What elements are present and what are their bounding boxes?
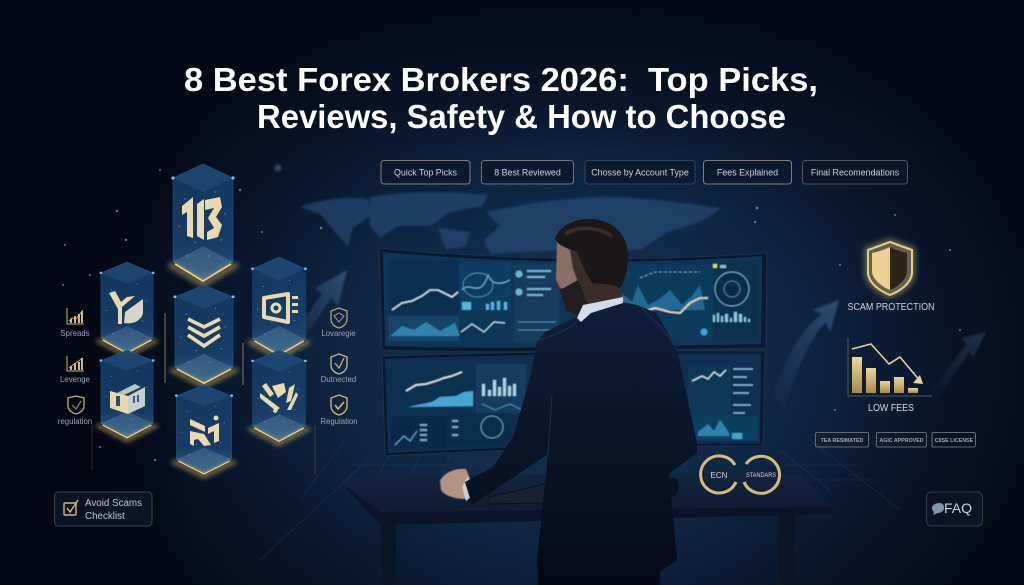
badge: ASIC xyxy=(876,432,926,447)
low fees label: LOW FEES xyxy=(868,403,914,414)
upper monitor xyxy=(379,248,767,352)
feature: regulation: regulation xyxy=(58,417,92,426)
title: Reviews, Safety & How to Choose xyxy=(257,98,786,135)
avoid scams checklist xyxy=(54,492,152,526)
FAQ button: FAQ xyxy=(944,500,972,516)
collar xyxy=(577,297,623,322)
tab: 8 best reviewed: 8 Best Reviewed xyxy=(494,168,561,178)
avoid scams checklist: Checklist xyxy=(85,511,125,522)
tab: quick top picks: Quick Top Picks xyxy=(394,168,458,178)
cube: centre bottom xyxy=(173,385,235,476)
jacket highlights xyxy=(540,307,677,454)
avoid scams checklist: Avoid Scams xyxy=(85,498,142,509)
tab: fees explained xyxy=(704,160,792,184)
ECN and standard rings xyxy=(701,456,780,493)
feature: spreads: Spreads xyxy=(60,329,90,338)
right chart panels xyxy=(625,265,713,337)
tab: choose by account type xyxy=(585,160,695,184)
left feature icons xyxy=(58,308,92,426)
feature: connected shield: Dutnected xyxy=(321,375,356,384)
cube: centre xyxy=(171,285,237,386)
title: 8 Best Forex Brokers 2026: Top Picks, xyxy=(184,61,818,98)
badge: FCA: TEA RESIMATED xyxy=(821,438,864,444)
regulation badges xyxy=(816,432,976,447)
arrow: far right xyxy=(928,332,986,398)
arrow: left cluster xyxy=(285,270,347,352)
cube: left upper xyxy=(97,262,157,356)
tab: fees explained: Fees Explained xyxy=(717,168,778,178)
cube: nB logo xyxy=(169,164,237,284)
tab: quick top picks xyxy=(381,160,470,184)
hand xyxy=(440,469,473,499)
cube: right upper xyxy=(249,257,309,358)
feature: leverage shield: Lovaregie xyxy=(321,329,356,338)
icon: chat bubble xyxy=(932,503,944,515)
cube: right lower xyxy=(249,350,309,444)
feature: leverage: Levenge xyxy=(60,375,90,384)
world map xyxy=(300,192,722,254)
cube: left lower xyxy=(97,350,157,440)
scam protection label: SCAM PROTECTION xyxy=(848,302,934,313)
keyboard xyxy=(487,484,545,504)
neck and face xyxy=(556,240,623,318)
tab: 8 best reviewed xyxy=(482,160,574,184)
jacket xyxy=(465,302,697,585)
big background arrows xyxy=(285,270,986,410)
ring: ECN: ECN xyxy=(711,471,728,480)
left chart panels xyxy=(391,364,758,449)
hair xyxy=(555,219,628,288)
left chart panels xyxy=(388,261,759,342)
scam protection shield xyxy=(868,242,912,295)
connector lines xyxy=(92,313,315,475)
badge: CySEC xyxy=(932,432,976,447)
badge: CySEC: CIISE LICENSE xyxy=(935,438,974,444)
ring: standard: STANDARS xyxy=(746,472,776,479)
mouse xyxy=(667,478,679,496)
low fees chart xyxy=(848,338,932,396)
broker cubes xyxy=(92,164,315,476)
arrow: centre right xyxy=(770,300,839,410)
floor grid xyxy=(260,440,900,560)
shirt cuff xyxy=(462,476,472,501)
badge: ASIC: AGIC APPROVED xyxy=(879,438,924,444)
tab: final recommendations xyxy=(802,160,908,184)
person xyxy=(440,219,697,585)
icon: checklist xyxy=(64,500,78,515)
badge: FCA xyxy=(816,432,868,447)
feature: regulation shield: Regulation xyxy=(320,417,358,426)
tab: final recommendations: Final Recomendations xyxy=(811,168,900,178)
decorative stars xyxy=(62,164,961,461)
navigation tabs xyxy=(381,160,908,184)
FAQ button xyxy=(926,492,982,526)
right chart panels xyxy=(688,364,730,416)
desk xyxy=(343,474,832,585)
right feature icons xyxy=(320,308,358,426)
lower monitor xyxy=(382,351,765,456)
tab: choose by account type: Chosse by Account Type xyxy=(591,168,689,178)
title xyxy=(184,61,818,135)
